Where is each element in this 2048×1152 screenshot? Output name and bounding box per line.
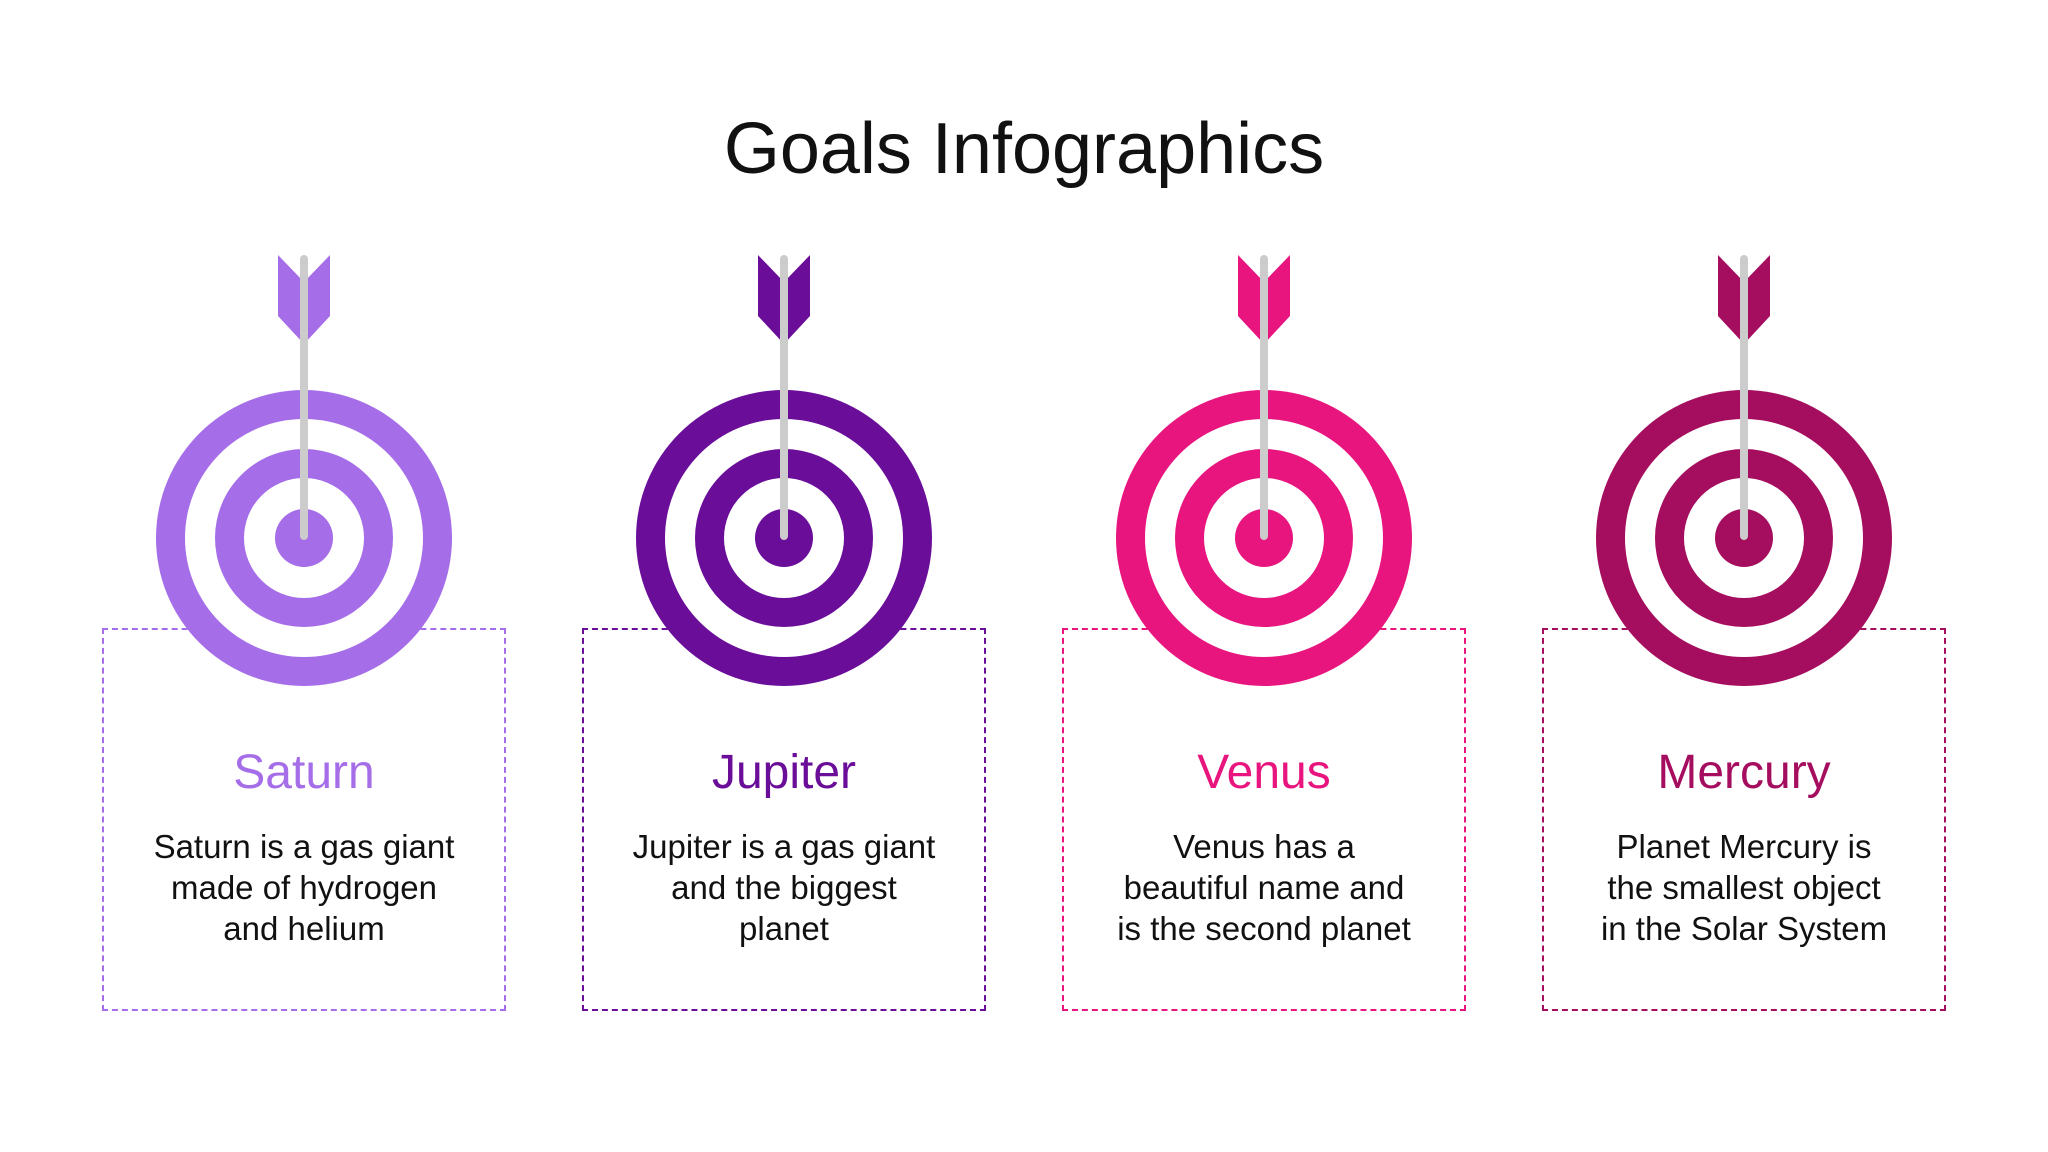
panel: Jupiter	[582, 255, 986, 1011]
text: the smallest object	[1607, 869, 1881, 906]
dashed box	[1062, 628, 1466, 1011]
dashed box	[102, 628, 506, 1011]
icon: target with arrow	[636, 255, 932, 686]
text: Venus has a	[1173, 828, 1355, 865]
icon: target with arrow	[156, 255, 452, 686]
text: planet	[739, 910, 829, 947]
panel: Venus	[1062, 255, 1466, 1011]
text: Planet Mercury is	[1617, 828, 1871, 865]
text: is the second planet	[1117, 910, 1411, 947]
dashed box	[582, 628, 986, 1011]
text: in the Solar System	[1601, 910, 1887, 947]
text: and helium	[223, 910, 385, 947]
text: Saturn is a gas giant	[154, 828, 454, 865]
text	[1601, 828, 1887, 947]
panel: Mercury	[1542, 255, 1946, 1011]
panel: Saturn	[102, 255, 506, 1011]
text: Jupiter is a gas giant	[633, 828, 935, 865]
dashed box	[1542, 628, 1946, 1011]
heading: Mercury	[1657, 746, 1831, 799]
text	[633, 828, 936, 947]
text: and the biggest	[671, 869, 897, 906]
heading: Venus	[1197, 746, 1331, 799]
title: Goals Infographics	[724, 109, 1324, 189]
icon: target with arrow	[1596, 255, 1892, 686]
heading: Saturn	[233, 746, 375, 799]
heading: Jupiter	[712, 746, 856, 799]
text	[1117, 828, 1411, 947]
text: beautiful name and	[1124, 869, 1404, 906]
text: made of hydrogen	[171, 869, 437, 906]
text	[154, 828, 454, 947]
icon: target with arrow	[1116, 255, 1412, 686]
